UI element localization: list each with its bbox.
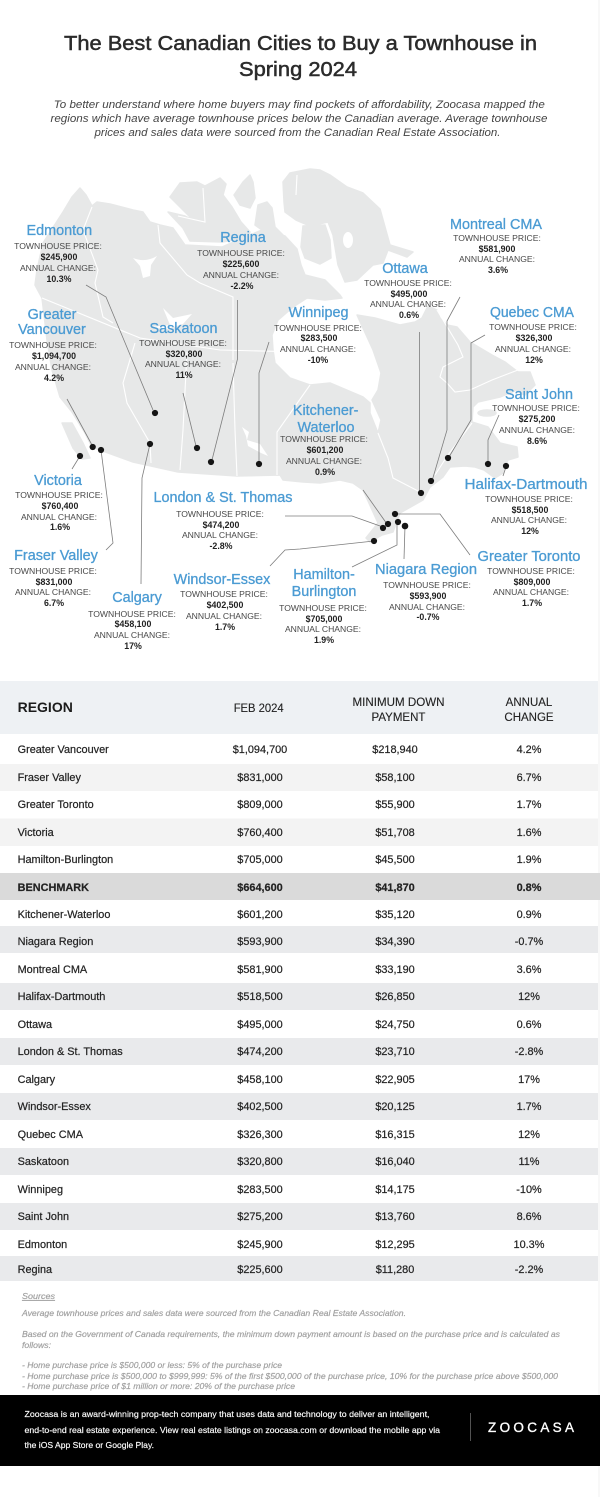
callout: Quebec CMA (489, 305, 577, 365)
callout: Montreal CMA: TOWNHOUSE PRICE: (453, 233, 541, 243)
callout: Niagara Region (375, 562, 477, 622)
callout: Saskatoon: Saskatoon (149, 321, 218, 337)
row: Edmonton (18, 1239, 545, 1251)
callout: Hamilton-Burlington: 1.9% (314, 635, 334, 645)
row: Edmonton: Edmonton (18, 1239, 67, 1251)
row: Regina: -2.2% (515, 1264, 544, 1276)
sources: - Home purchase price of $1 million or more: 20% of the purchase price (22, 1381, 295, 1391)
callout: Victoria: Victoria (34, 473, 82, 489)
row: London and St. Thomas (0, 1038, 598, 1065)
row: Calgary: Calgary (18, 1074, 56, 1086)
callout: Victoria: TOWNHOUSE PRICE: (15, 490, 103, 500)
sources (21, 1291, 560, 1391)
callout: Winnipeg (274, 305, 362, 365)
callout: Kitchener-Waterloo: Waterloo (297, 420, 355, 436)
callout: Victoria: ANNUAL CHANGE: (21, 512, 97, 522)
row: Ottawa: Ottawa (18, 1019, 53, 1031)
callout: Halifax-Dartmouth: TOWNHOUSE PRICE: (485, 494, 573, 504)
row: Benchmark: $41,870 (375, 882, 415, 894)
callout: London and St. Thomas: London & St. Thomas (154, 490, 292, 506)
row: Halifax-Dartmouth: $26,850 (375, 991, 415, 1003)
sources: Sources (22, 1291, 55, 1301)
callout: Greater Toronto (478, 549, 580, 608)
callout: Regina: TOWNHOUSE PRICE: (197, 248, 285, 258)
callout: Kitchener-Waterloo: $601,200 (307, 445, 343, 455)
callout: Niagara Region: -0.7% (417, 612, 440, 622)
row: Halifax-Dartmouth: $518,500 (237, 991, 283, 1003)
callout: Halifax-Dartmouth: ANNUAL CHANGE: (491, 515, 567, 525)
callout: Greater Vancouver: $1,094,700 (32, 351, 76, 361)
row: Halifax-Dartmouth (0, 983, 598, 1010)
row: Winnipeg: $14,175 (375, 1184, 415, 1196)
callout: Saint John (492, 387, 580, 446)
callout: Greater Vancouver: TOWNHOUSE PRICE: (9, 340, 97, 350)
row: Fraser Valley: Fraser Valley (18, 772, 81, 784)
row: London and St. Thomas: -2.8% (515, 1046, 544, 1058)
callout: Windsor-Essex: TOWNHOUSE PRICE: (180, 589, 268, 599)
row: Montreal CMA: $33,190 (375, 964, 415, 976)
sources: Based on the Government of Canada requirements, the minimum down payment amount is based on the purchase price and is calculated as (22, 1329, 560, 1339)
table header: ANNUAL (506, 697, 553, 709)
sources: - Home purchase price is $500,000 to $999,999: 5% of the first $500,000 of the purchase price, 10% for the purchase price above $500,000 (22, 1371, 558, 1381)
callout: Saint John: $275,200 (519, 414, 555, 424)
callout: Hamilton-Burlington: $705,000 (306, 614, 342, 624)
callout: Calgary: $458,100 (115, 619, 151, 629)
row: Fraser Valley (0, 764, 598, 791)
callout: Fraser Valley: ANNUAL CHANGE: (15, 587, 91, 597)
row: Hamilton-Burlington: $45,500 (375, 854, 415, 866)
row: Greater Toronto: $55,900 (375, 799, 415, 811)
callout: Fraser Valley (9, 548, 99, 608)
callout: Fraser Valley: 6.7% (44, 598, 64, 608)
callout: Kitchener-Waterloo: Kitchener- (293, 403, 359, 419)
callout: Ottawa (364, 261, 452, 320)
callout: Montreal CMA: $581,900 (479, 244, 515, 254)
sources: follows: (22, 1340, 51, 1350)
callout: Greater Vancouver: Greater (28, 307, 77, 323)
map water and lakes (133, 232, 353, 456)
callout: London and St. Thomas (154, 490, 292, 551)
row: Winnipeg: -10% (516, 1184, 542, 1196)
row: Calgary: $458,100 (237, 1074, 283, 1086)
row: Saskatoon: Saskatoon (18, 1156, 69, 1168)
row: Victoria: $760,400 (237, 827, 283, 839)
sources: - Home purchase price is $500,000 or less: 5% of the purchase price (22, 1360, 282, 1370)
callout: Regina (197, 230, 285, 291)
row: Niagara Region: $593,900 (237, 936, 283, 948)
row: Halifax-Dartmouth: Halifax-Dartmouth (18, 991, 105, 1003)
row: Saskatoon: $16,040 (375, 1156, 415, 1168)
callout: London and St. Thomas: $474,200 (203, 520, 239, 530)
row: Calgary (18, 1074, 540, 1086)
callout: Kitchener-Waterloo: TOWNHOUSE PRICE: (280, 434, 368, 444)
callout: Niagara Region: ANNUAL CHANGE: (389, 602, 465, 612)
row: Quebec CMA: $16,315 (375, 1129, 415, 1141)
row: Regina: Regina (18, 1264, 53, 1276)
row: Fraser Valley: $58,100 (375, 772, 415, 784)
intro paragraph: regions which have average townhouse prices below the Canadian average. Average townhouse (50, 113, 548, 125)
row: Greater Vancouver: Greater Vancouver (18, 744, 109, 756)
row: Saint John: $275,200 (237, 1211, 283, 1223)
callout: Edmonton (14, 223, 102, 284)
callout: Windsor-Essex: Windsor-Essex (174, 572, 271, 588)
callout: Calgary: 17% (124, 641, 142, 651)
row: Benchmark: $664,600 (237, 882, 283, 894)
row: Windsor-Essex: Windsor-Essex (18, 1101, 91, 1113)
row: Benchmark: 0.8% (517, 882, 542, 894)
callout: Regina: Regina (220, 230, 266, 246)
row: Hamilton-Burlington: 1.9% (517, 854, 542, 866)
callout: Hamilton-Burlington: TOWNHOUSE PRICE: (279, 603, 367, 613)
row: Montreal CMA: Montreal CMA (18, 964, 88, 976)
row: Benchmark: BENCHMARK (18, 882, 89, 894)
row: Quebec CMA (18, 1129, 540, 1141)
row: Ottawa (18, 1019, 542, 1031)
row: Ottawa: 0.6% (517, 1019, 542, 1031)
table header (0, 681, 598, 734)
footer description (24, 1409, 440, 1450)
row: Winnipeg: $283,500 (237, 1184, 283, 1196)
callout: London and St. Thomas: ANNUAL CHANGE: (182, 530, 258, 540)
row: Victoria: 1.6% (517, 827, 542, 839)
row: Fraser Valley: 6.7% (517, 772, 542, 784)
callout: Hamilton-Burlington: Burlington (292, 584, 356, 600)
row: Saskatoon: 11% (518, 1156, 540, 1168)
row: Ottawa: $495,000 (237, 1019, 283, 1031)
row: Greater Toronto: Greater Toronto (18, 799, 94, 811)
callout: Halifax-Dartmouth: Halifax-Dartmouth (464, 477, 588, 493)
table header: CHANGE (504, 712, 554, 724)
callout: Saskatoon (139, 321, 227, 380)
callout: Saint John: 8.6% (527, 436, 547, 446)
row: Niagara Region: $34,390 (375, 936, 415, 948)
row: Greater Vancouver: $218,940 (372, 744, 418, 756)
logo: Zoocasa: ZOOCASA (488, 1420, 574, 1435)
row: Regina: $225,600 (237, 1264, 283, 1276)
row: Winnipeg: Winnipeg (18, 1184, 63, 1196)
callout: London and St. Thomas: TOWNHOUSE PRICE: (176, 509, 264, 519)
callout: Winnipeg: -10% (308, 355, 328, 365)
callout: Niagara Region: TOWNHOUSE PRICE: (383, 580, 471, 590)
row: Regina (0, 1256, 598, 1281)
table (0, 681, 600, 1281)
map of Canada (35, 169, 535, 542)
row: Kitchener-Waterloo: $601,200 (237, 909, 283, 921)
callout: Niagara Region: Niagara Region (375, 562, 477, 578)
row: Windsor-Essex: $402,500 (237, 1101, 283, 1113)
callout: Saint John: ANNUAL CHANGE: (499, 425, 575, 435)
row: Regina: $11,280 (376, 1264, 414, 1276)
callout: Ottawa: Ottawa (382, 261, 428, 277)
row: London and St. Thomas: $23,710 (375, 1046, 415, 1058)
row: Saint John: $13,760 (375, 1211, 415, 1223)
title (64, 33, 537, 81)
callout: Montreal CMA (450, 217, 542, 275)
callout: Regina: $225,600 (223, 259, 259, 269)
callout: Greater Vancouver: Vancouver (18, 322, 86, 338)
row: Windsor-Essex: $20,125 (375, 1101, 415, 1113)
callout: Edmonton: Edmonton (26, 223, 92, 239)
callout: Calgary: TOWNHOUSE PRICE: (88, 609, 176, 619)
row: Quebec CMA: 12% (518, 1129, 540, 1141)
callout: Saint John: Saint John (505, 387, 573, 403)
row: London and St. Thomas: $474,200 (237, 1046, 283, 1058)
callout: Greater Vancouver: ANNUAL CHANGE: (15, 362, 91, 372)
leader lines and city dots (67, 285, 509, 584)
callout: Montreal CMA: 3.6% (488, 265, 508, 275)
row: Benchmark (0, 873, 600, 900)
callout: Fraser Valley: $831,000 (36, 577, 72, 587)
callout: Calgary: Calgary (112, 590, 163, 606)
callout: Hamilton-Burlington (279, 567, 367, 645)
row: Edmonton: $245,900 (237, 1239, 283, 1251)
intro paragraph: prices and sales data were sourced from the Canadian Real Estate Association. (93, 127, 501, 139)
callout: Halifax-Dartmouth (464, 477, 588, 536)
callout: Winnipeg: TOWNHOUSE PRICE: (274, 323, 362, 333)
callout: Niagara Region: $593,900 (410, 591, 446, 601)
callout: Winnipeg: Winnipeg (288, 305, 348, 321)
callout: Windsor-Essex: 1.7% (215, 622, 235, 632)
row: Montreal CMA (18, 964, 542, 976)
callout: Fraser Valley: Fraser Valley (14, 548, 99, 564)
callout: Greater Toronto: TOWNHOUSE PRICE: (487, 566, 575, 576)
row: Niagara Region (0, 926, 598, 953)
callout: Ottawa: TOWNHOUSE PRICE: (364, 278, 452, 288)
callout: Windsor-Essex: $402,500 (207, 600, 243, 610)
callout: London and St. Thomas: -2.8% (210, 541, 233, 551)
callout: Quebec CMA: ANNUAL CHANGE: (495, 344, 571, 354)
callout: Greater Toronto: $809,000 (514, 577, 550, 587)
intro paragraph: To better understand where home buyers may find pockets of affordability, Zoocasa mapped the (54, 99, 545, 111)
row: Niagara Region: -0.7% (515, 936, 544, 948)
callout: Quebec CMA: TOWNHOUSE PRICE: (489, 322, 577, 332)
callout: Ottawa: 0.6% (399, 310, 419, 320)
callout: Victoria: $760,400 (42, 501, 78, 511)
row: Windsor-Essex: 1.7% (517, 1101, 542, 1113)
row: Windsor-Essex (0, 1093, 598, 1120)
row: Edmonton: $12,295 (375, 1239, 415, 1251)
province borders (42, 175, 518, 492)
callout: Calgary: ANNUAL CHANGE: (94, 630, 170, 640)
row: Kitchener-Waterloo (18, 909, 542, 921)
callout: Ottawa: ANNUAL CHANGE: (370, 299, 446, 309)
callout: Hamilton-Burlington: Hamilton- (293, 567, 355, 583)
row: Quebec CMA: Quebec CMA (18, 1129, 84, 1141)
row: Calgary: $22,905 (375, 1074, 415, 1086)
row: Greater Vancouver (18, 744, 542, 756)
footer description: the iOS App Store or Google Play. (24, 1440, 154, 1450)
row: Victoria: $51,708 (375, 827, 415, 839)
callout: Halifax-Dartmouth: $518,500 (512, 505, 548, 515)
callout: Saskatoon: $320,800 (166, 349, 202, 359)
row: London and St. Thomas: London & St. Thomas (18, 1046, 123, 1058)
title: The Best Canadian Cities to Buy a Townhouse in (64, 33, 537, 55)
callout: Edmonton: TOWNHOUSE PRICE: (14, 241, 102, 251)
footer description: end-to-end real estate experience. View real estate listings on zoocasa.com or download the mobile app via (24, 1425, 440, 1435)
table header: PAYMENT (372, 712, 425, 724)
row: Hamilton-Burlington: $705,000 (237, 854, 283, 866)
callout: Kitchener-Waterloo (280, 403, 368, 477)
callout: Greater Toronto: ANNUAL CHANGE: (493, 587, 569, 597)
row: Edmonton: 10.3% (514, 1239, 545, 1251)
row: Hamilton-Burlington: Hamilton-Burlington (18, 854, 113, 866)
callout: Victoria: 1.6% (50, 522, 70, 532)
callout: Montreal CMA: Montreal CMA (450, 217, 542, 233)
footer (0, 1395, 600, 1466)
callout: Halifax-Dartmouth: 12% (521, 526, 539, 536)
callout: Ottawa: $495,000 (391, 289, 427, 299)
row: Fraser Valley: $831,000 (237, 772, 283, 784)
row: Ottawa: $24,750 (375, 1019, 415, 1031)
callout: Fraser Valley: TOWNHOUSE PRICE: (9, 566, 97, 576)
callout: Edmonton: 10.3% (47, 274, 72, 284)
table header: REGION (18, 699, 73, 715)
callout: Kitchener-Waterloo: 0.9% (315, 467, 335, 477)
callout: Regina: -2.2% (231, 281, 254, 291)
row: Montreal CMA: $581,900 (237, 964, 283, 976)
row: Saskatoon: $320,800 (237, 1156, 283, 1168)
callout: Victoria (15, 473, 103, 532)
callout: Saskatoon: 11% (175, 370, 193, 380)
sources: Average townhouse prices and sales data were sourced from the Canadian Real Estate Association. (21, 1308, 406, 1318)
callout: Quebec CMA: 12% (525, 355, 543, 365)
callout: Montreal CMA: ANNUAL CHANGE: (459, 254, 535, 264)
row: Halifax-Dartmouth: 12% (518, 991, 540, 1003)
row: Saint John: 8.6% (517, 1211, 542, 1223)
table header: MINIMUM DOWN (352, 697, 444, 709)
row: Saskatoon (0, 1148, 598, 1175)
callout: Saint John: TOWNHOUSE PRICE: (492, 403, 580, 413)
intro paragraph (50, 99, 548, 139)
title: Spring 2024 (239, 59, 357, 81)
callout: Edmonton: $245,900 (41, 252, 77, 262)
callout: Greater Toronto: Greater Toronto (478, 549, 580, 565)
callout: Greater Vancouver: 4.2% (44, 373, 64, 383)
row: Calgary: 17% (518, 1074, 540, 1086)
table header: FEB 2024 (234, 703, 284, 715)
callout: Windsor-Essex: ANNUAL CHANGE: (186, 611, 262, 621)
row: Greater Vancouver: 4.2% (517, 744, 542, 756)
row: Greater Vancouver: $1,094,700 (233, 744, 287, 756)
callout: Kitchener-Waterloo: ANNUAL CHANGE: (286, 456, 362, 466)
callout: Edmonton: ANNUAL CHANGE: (20, 263, 96, 273)
row: Winnipeg (18, 1184, 542, 1196)
callout: Greater Vancouver (9, 307, 97, 383)
callout: Saskatoon: TOWNHOUSE PRICE: (139, 338, 227, 348)
callout: Winnipeg: $283,500 (301, 333, 337, 343)
row: Victoria (0, 818, 598, 846)
row: Niagara Region: Niagara Region (18, 936, 93, 948)
callout: Calgary (88, 590, 176, 651)
row: Saint John: Saint John (18, 1211, 69, 1223)
callout: Windsor-Essex (174, 572, 271, 632)
row: Montreal CMA: 3.6% (517, 964, 542, 976)
footer description: Zoocasa is an award-winning prop-tech company that uses data and technology to deliver an intelligent, (24, 1409, 430, 1419)
row: Saint John (0, 1203, 598, 1230)
row: Kitchener-Waterloo: 0.9% (517, 909, 542, 921)
row: Quebec CMA: $326,300 (237, 1129, 283, 1141)
row: Greater Toronto: $809,000 (237, 799, 283, 811)
callout: Quebec CMA: Quebec CMA (490, 305, 574, 321)
callout: Saskatoon: ANNUAL CHANGE: (145, 359, 221, 369)
row: Greater Toronto: 1.7% (517, 799, 542, 811)
callout: Winnipeg: ANNUAL CHANGE: (280, 344, 356, 354)
row: Greater Toronto (18, 799, 542, 811)
row: Victoria: Victoria (18, 827, 55, 839)
row: Kitchener-Waterloo: Kitchener-Waterloo (18, 909, 110, 921)
row: Kitchener-Waterloo: $35,120 (375, 909, 415, 921)
callout: Hamilton-Burlington: ANNUAL CHANGE: (285, 624, 361, 634)
callout: Greater Toronto: 1.7% (522, 598, 542, 608)
row: Hamilton-Burlington (18, 854, 542, 866)
callout: Regina: ANNUAL CHANGE: (203, 270, 279, 280)
callout: Quebec CMA: $326,300 (516, 333, 552, 343)
